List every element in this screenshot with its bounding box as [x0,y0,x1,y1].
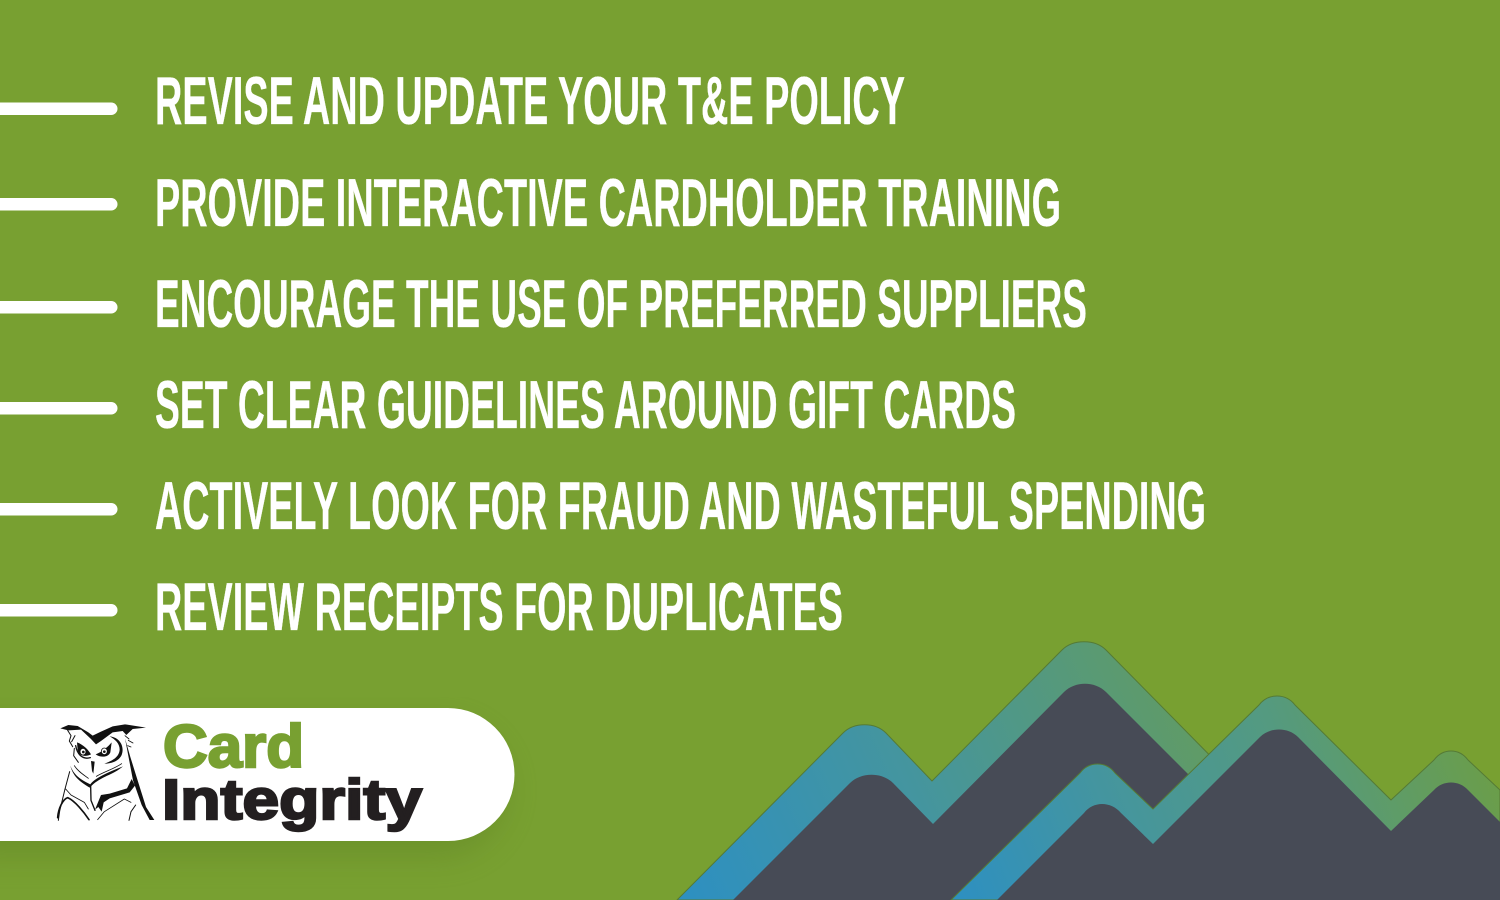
back mountain, coloured band [677,642,1240,900]
item 6: REVIEW RECEIPTS FOR DUPLICATES [155,570,843,645]
front mountain, dark face [997,730,1500,900]
item 4 [0,368,1016,443]
item 2 [0,166,1061,241]
item 3 [0,267,1087,342]
logo panel [0,708,514,857]
mountains graphic [677,642,1500,900]
icon: owl [58,724,154,820]
item 1: REVISE AND UPDATE YOUR T&E POLICY [155,64,905,139]
logo wordmark: Card [163,713,304,780]
front mountain, coloured band [951,696,1500,900]
list of recommendations [0,64,1206,645]
back mountain, dark face [733,684,1230,900]
logo wordmark [162,713,422,832]
item 6 [0,570,843,645]
logo wordmark: Integrity [162,768,422,832]
item 1 [0,64,905,139]
